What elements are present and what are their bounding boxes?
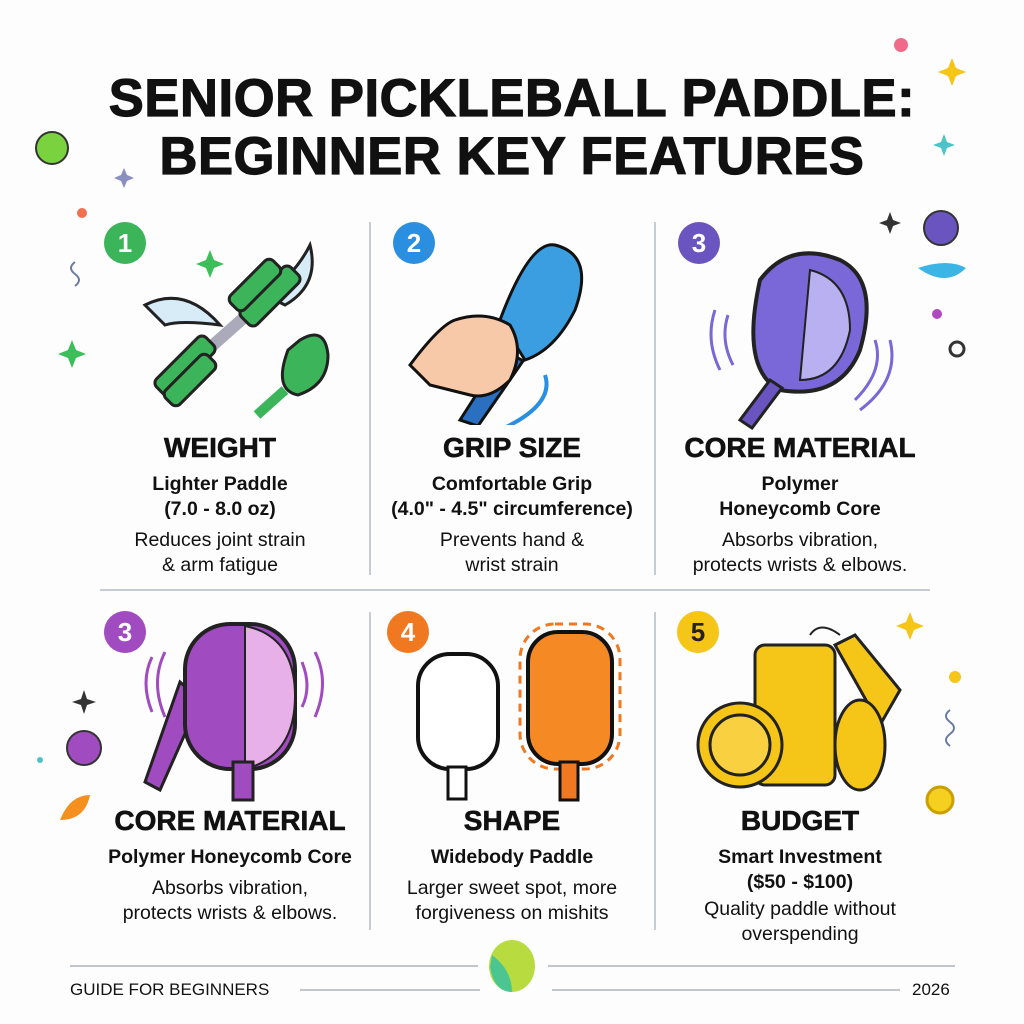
panel: core material bottom: Polymer Honeycomb Core — [108, 846, 352, 868]
panel: shape: Larger sweet spot, more — [407, 877, 617, 899]
panel: shape: forgiveness on mishits — [416, 902, 608, 924]
panel: budget: Smart Investment — [718, 846, 882, 868]
badge 4: 4 — [401, 617, 415, 647]
icon: purple paddles — [143, 622, 324, 802]
panel: core material top: Honeycomb Core — [719, 498, 881, 520]
badge 3b — [104, 611, 146, 653]
panel: weight: Reduces joint strain — [134, 529, 306, 551]
badge 2 — [393, 222, 435, 264]
icon: honeycomb paddle — [710, 251, 894, 430]
panel: core material top: CORE MATERIAL — [684, 432, 916, 463]
footer — [70, 940, 955, 999]
panel: shape: Widebody Paddle — [431, 846, 593, 868]
panel: core material bottom: Absorbs vibration, — [152, 877, 308, 899]
panel: core material top: Absorbs vibration, — [722, 529, 878, 551]
panel: budget: overspending — [741, 923, 859, 945]
panel: grip size — [391, 432, 633, 576]
panel: weight: (7.0 - 8.0 oz) — [164, 498, 276, 520]
badge 4 — [387, 611, 429, 653]
panel: grip size: (4.0" - 4.5" circumference) — [391, 498, 633, 520]
title: BEGINNER KEY FEATURES — [160, 127, 864, 186]
icon: paddle shapes — [416, 622, 622, 802]
icon: hand holding paddle — [408, 243, 584, 425]
footer: GUIDE FOR BEGINNERS — [70, 980, 269, 999]
panel: grip size: Comfortable Grip — [432, 473, 592, 495]
panel: grip size: GRIP SIZE — [443, 432, 581, 463]
title — [109, 69, 915, 186]
panel: budget: Quality paddle without — [704, 898, 896, 920]
badge 3b: 3 — [118, 617, 132, 647]
panel: core material bottom: protects wrists & elbows. — [123, 902, 337, 924]
panel: grip size: Prevents hand & — [440, 529, 584, 551]
panel: core material bottom: CORE MATERIAL — [114, 805, 346, 836]
panel: weight — [134, 432, 306, 576]
panel: core material top: protects wrists & elbows. — [693, 554, 907, 576]
badge 3: 3 — [692, 228, 706, 258]
panel: shape: SHAPE — [464, 805, 560, 836]
panel: budget: ($50 - $100) — [747, 871, 853, 893]
badge 3 — [678, 222, 720, 264]
icon: coins and tag — [696, 626, 902, 792]
panel: core material top — [684, 432, 916, 576]
panel: grip size: wrist strain — [465, 554, 559, 576]
badge 2: 2 — [407, 228, 421, 258]
footer: 2026 — [912, 980, 950, 999]
panel: core material top: Polymer — [762, 473, 838, 495]
icon: winged dumbbell — [142, 240, 330, 419]
panel: weight: & arm fatigue — [162, 554, 278, 576]
badge 1: 1 — [118, 228, 132, 258]
badge 5: 5 — [691, 617, 705, 647]
panel: core material bottom — [108, 805, 352, 924]
title: SENIOR PICKLEBALL PADDLE: — [109, 69, 915, 128]
panel: shape — [407, 805, 617, 924]
badge 5 — [677, 611, 719, 653]
panel: weight: WEIGHT — [164, 432, 276, 463]
panel: budget — [704, 805, 896, 945]
badge 1 — [104, 222, 146, 264]
panel: weight: Lighter Paddle — [152, 473, 288, 495]
panel: budget: BUDGET — [741, 805, 859, 836]
